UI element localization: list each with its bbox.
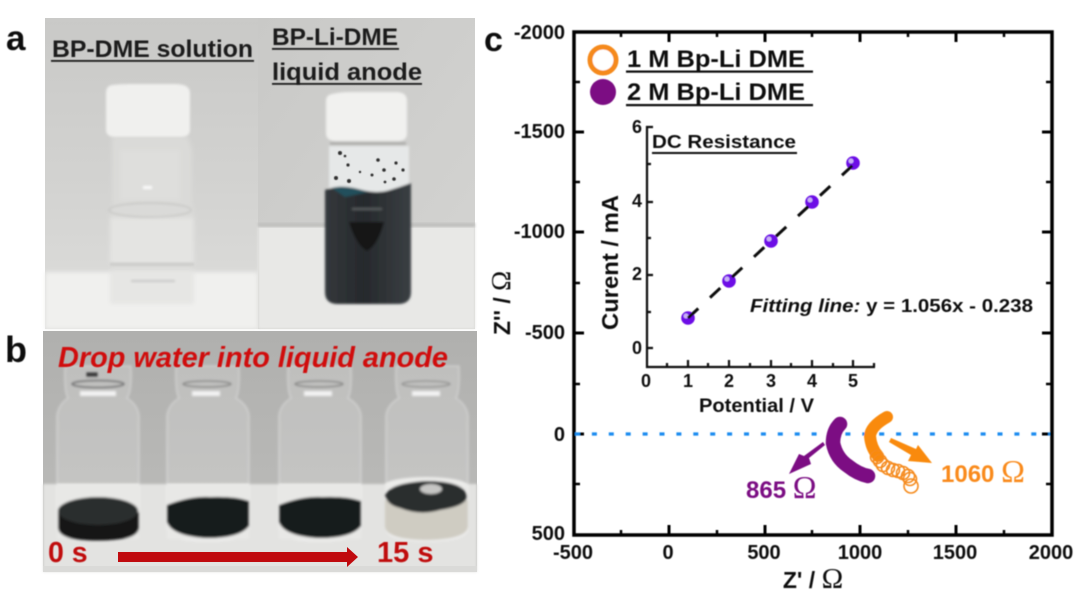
y axis tick labels: -1500 [514, 121, 565, 143]
inset x tick labels [641, 371, 858, 391]
inset axis titles: Potential / V [699, 395, 814, 417]
arrow: to 1060 ohm [889, 438, 932, 463]
data: 1 M orange curve [870, 417, 918, 493]
fitting line equation: Fitting line: y = 1.056x - 0.238 [750, 295, 1033, 316]
label: BP-Li-DME liquid anode: BP-Li-DME [272, 24, 398, 51]
data points [681, 156, 860, 325]
y axis title: Z'' / Ω [486, 271, 516, 335]
zero reference line [575, 432, 1050, 436]
y axis tick labels: -2000 [514, 22, 565, 44]
specks in vial [334, 151, 405, 183]
x axis tick labels: 500 [747, 542, 781, 564]
y axis tick labels: -1000 [514, 221, 565, 243]
label: 0 s: 0 s [48, 537, 88, 569]
plot frame and ticks [574, 32, 1052, 535]
cap [106, 84, 190, 137]
panel letter a: a [6, 19, 26, 58]
inset y tick labels: 4 [632, 191, 642, 211]
legend: 2 M Bp-Li DME [627, 79, 805, 106]
data: 2 M purple curve [833, 424, 868, 476]
inset chart: DC resistance [597, 117, 1033, 417]
legend: 1 M Bp-Li DME [627, 46, 805, 73]
arrow: to 865 ohm [789, 442, 825, 474]
vial 1 at 0 s [57, 366, 139, 541]
cap [326, 92, 407, 141]
bottle body [110, 137, 194, 304]
x axis tick labels: 1000 [838, 542, 882, 564]
vial 2 [167, 366, 249, 541]
vial 4 at 15 s [385, 366, 468, 541]
panel letter b: b [5, 329, 27, 370]
x axis tick labels: 2000 [1029, 542, 1073, 564]
y axis tick labels: 0 [554, 424, 565, 446]
inset x tick labels: 5 [848, 371, 858, 391]
label: 1060 ohm: 1060 Ω [941, 453, 1025, 489]
x axis tick labels: -500 [553, 542, 593, 564]
panel c: impedance chart [486, 22, 1073, 595]
x axis tick labels: 1500 [933, 542, 977, 564]
x axis tick labels: 0 [662, 542, 674, 564]
y axis tick labels: -500 [525, 322, 565, 344]
x axis tick labels [553, 542, 1073, 564]
panel letter c: c [484, 21, 503, 59]
inset axes [647, 127, 875, 367]
point highlights [684, 158, 854, 318]
inset x tick labels: 1 [683, 371, 693, 391]
label: BP-Li-DME liquid anode [272, 24, 422, 86]
inset x tick labels: 2 [724, 371, 734, 391]
label: 865 ohm: 865 Ω [746, 469, 816, 505]
inset y tick labels [632, 117, 642, 358]
y axis tick labels [514, 22, 565, 545]
photo: BP-DME solution vial [45, 18, 258, 329]
panel b: water drop photograph [43, 331, 477, 572]
title: Drop water into liquid anode: Drop water into liquid anode [58, 342, 448, 374]
label: BP-Li-DME liquid anode: liquid anode [272, 59, 422, 86]
label: BP-DME solution: BP-DME solution [52, 36, 253, 63]
arrow: time progression [118, 547, 358, 567]
inset y tick labels: 2 [632, 264, 642, 284]
legend [590, 46, 813, 106]
label: 15 s: 15 s [377, 537, 433, 569]
inset x tick labels: 4 [807, 371, 817, 391]
inset y tick labels: 0 [632, 338, 642, 358]
vial 3 [279, 366, 361, 541]
fit line [688, 165, 853, 318]
y axis tick labels: 500 [532, 523, 565, 545]
inset title: DC Resistance [652, 131, 796, 152]
photo: BP-Li-DME liquid anode vial [258, 18, 475, 329]
inset y tick labels: 6 [632, 117, 642, 137]
inset x tick labels: 3 [766, 371, 776, 391]
x axis title: Z' / Ω [783, 563, 843, 595]
inset chart: DC resistance: Curent / mA [597, 195, 623, 330]
panel a: vial photographs [45, 18, 475, 329]
inset x tick labels: 0 [641, 371, 651, 391]
